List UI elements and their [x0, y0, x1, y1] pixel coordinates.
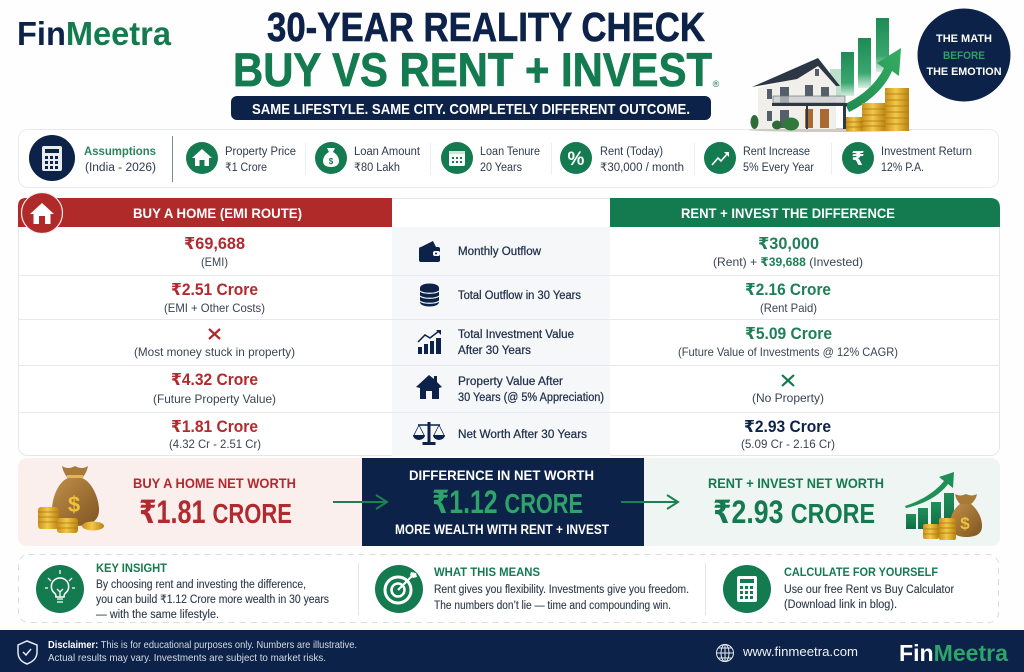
icon: home badge [22, 192, 62, 234]
badge: the math before the emotion: BEFORE [943, 50, 985, 62]
title line 2: BUY VS RENT + INVEST [233, 43, 712, 96]
insight: what this means: WHAT THIS MEANS [434, 565, 540, 579]
item: loan amount: Loan Amount [354, 146, 421, 158]
item: property price: Property Price [225, 146, 296, 158]
assumptions heading: (India - 2026) [85, 162, 156, 174]
disclaimer [48, 639, 357, 664]
cell: investment value buy: (Most money stuck in property) [134, 345, 295, 359]
arrow: difference to rent [621, 495, 678, 509]
panel: assumptions strip [18, 130, 998, 188]
column: buy values [134, 235, 295, 451]
insight: key insight [36, 561, 329, 621]
cell: net worth buy: (4.32 Cr - 2.51 Cr) [169, 437, 261, 451]
cell: monthly outflow rent [713, 235, 863, 269]
insight: key insight: KEY INSIGHT [96, 561, 168, 575]
cell: property value rent [752, 375, 824, 405]
item: property price [186, 142, 296, 174]
registered mark: ® [713, 79, 720, 89]
metric: net worth [413, 422, 587, 445]
panel: difference in net worth: MORE WEALTH WITH RENT + INVEST [395, 522, 610, 537]
panel: difference in net worth: ₹1.12 CRORE [432, 484, 583, 520]
badge: the math before the emotion: THE MATH [936, 33, 992, 45]
item: loan tenure: Loan Tenure [480, 146, 540, 158]
cell: property value buy: ₹4.32 Crore [171, 371, 258, 389]
cell: monthly outflow buy [184, 235, 245, 269]
badge: the math before the emotion: THE EMOTION [926, 66, 1002, 78]
assumptions heading [84, 146, 156, 174]
item: rent today [560, 142, 684, 174]
badge: the math before the emotion [918, 8, 1010, 102]
cell: investment value buy [134, 329, 295, 359]
panel: difference in net worth: DIFFERENCE IN NET WORTH [409, 467, 594, 483]
panel: rent + invest net worth [644, 458, 1000, 546]
metric: total investment value: Total Investment Value [458, 329, 574, 341]
rent net worth value: ₹2.93 CRORE [713, 494, 875, 530]
buy net worth label: BUY A HOME NET WORTH [133, 475, 296, 491]
column: rent + invest values [678, 235, 898, 451]
header: buy a home: BUY A HOME (EMI ROUTE) [133, 205, 302, 221]
cell: investment value rent: (Future Value of Investments @ 12% CAGR) [678, 345, 898, 359]
item: loan tenure [441, 142, 540, 174]
item: loan amount: $ [329, 157, 334, 166]
header: buy a home [18, 198, 392, 227]
cell: net worth rent: ₹2.93 Crore [744, 418, 831, 436]
icon: calculator [29, 135, 75, 181]
cell: net worth rent [741, 418, 835, 451]
cell: net worth buy [169, 418, 261, 451]
rent net worth label: RENT + INVEST NET WORTH [708, 475, 884, 491]
metric: net worth: Net Worth After 30 Years [458, 429, 587, 441]
panel: comparison table [18, 192, 1000, 456]
cell: total outflow rent [745, 281, 831, 315]
panel: difference in net worth [362, 458, 644, 546]
item: rent today: % [568, 149, 585, 170]
cell: monthly outflow rent: (Rent) + ₹39,688 (Invested) [713, 255, 863, 269]
subtitle pill: SAME LIFESTYLE. SAME CITY. COMPLETELY DIFFERENT OUTCOME. [252, 101, 690, 118]
item: investment return: 12% P.A. [881, 162, 924, 174]
item: rent increase [704, 142, 814, 174]
item: loan amount [315, 142, 421, 174]
item: investment return [842, 142, 972, 174]
icon: money bag and coins [38, 466, 104, 533]
cell: net worth rent: (5.09 Cr - 2.16 Cr) [741, 437, 835, 451]
metric: monthly outflow: Monthly Outflow [458, 246, 542, 258]
insight: calculate for yourself: CALCULATE FOR YOURSELF [784, 565, 938, 579]
icon: growth chart, coins and bag: $ [960, 514, 970, 533]
header: rent + invest: RENT + INVEST THE DIFFERENCE [681, 205, 895, 221]
metric: property value: 30 Years (@ 5% Appreciation) [458, 392, 604, 404]
icon: target [375, 565, 423, 613]
panel: buy net worth [18, 458, 363, 546]
item: rent today: ₹30,000 / month [600, 162, 684, 174]
icon: calculator [723, 565, 771, 613]
insight: calculate for yourself: Use our free Rent vs Buy Calculator [784, 584, 954, 596]
website: www.finmeetra.com [742, 644, 858, 659]
item: loan amount: ₹80 Lakh [354, 162, 400, 174]
cell: investment value rent: ₹5.09 Crore [745, 325, 832, 343]
item: investment return: ₹ [851, 149, 865, 170]
insight: what this means: Rent gives you flexibility. Investments give you freedom. [434, 584, 689, 596]
metric: total investment value [418, 329, 574, 357]
insight: calculate for yourself: (Download link in blog). [784, 599, 897, 611]
icon: globe [716, 644, 734, 662]
cell: property value buy [153, 371, 276, 406]
cell: total outflow rent: (Rent Paid) [760, 301, 817, 315]
title block [231, 4, 720, 120]
metric: total outflow: Total Outflow in 30 Years [458, 290, 581, 302]
item: rent today: Rent (Today) [600, 146, 663, 158]
item: rent increase: Rent Increase [743, 146, 810, 158]
footer logo: FinMeetra [899, 640, 1008, 666]
cell: total outflow buy: (EMI + Other Costs) [164, 301, 265, 315]
insight: key insight: — with the same lifestyle. [96, 609, 219, 621]
panel: insights [18, 554, 998, 622]
item: rent increase: 5% Every Year [743, 162, 814, 174]
cell: monthly outflow buy: (EMI) [201, 255, 228, 269]
title line 1: 30-YEAR REALITY CHECK [267, 4, 705, 50]
cell: property value rent: (No Property) [752, 391, 824, 405]
cell: monthly outflow rent: ₹30,000 [758, 235, 819, 253]
metric: total investment value: After 30 Years [458, 345, 531, 357]
logo: FinMeetra: FinMeetra [17, 15, 172, 52]
cell: net worth buy: ₹1.81 Crore [171, 418, 258, 436]
header: rent + invest [610, 198, 1000, 227]
insight: key insight: By choosing rent and investing the difference, [96, 579, 306, 591]
icon: shield [18, 641, 37, 664]
assumptions heading: Assumptions [84, 146, 156, 158]
cell: monthly outflow buy: ₹69,688 [184, 235, 245, 253]
disclaimer: Actual results may vary. Investments are subject to market risks. [48, 652, 326, 664]
column: comparison metrics [413, 241, 604, 445]
disclaimer: Disclaimer: This is for educational purposes only. Numbers are illustrative. [48, 639, 357, 651]
insight: key insight: you can build ₹1.12 Crore more wealth in 30 years [96, 594, 329, 606]
item: investment return: Investment Return [881, 146, 972, 158]
insight: calculate for yourself [723, 565, 954, 613]
cell: total outflow buy: ₹2.51 Crore [171, 281, 258, 299]
cell: investment value rent [678, 325, 898, 359]
cell: property value buy: (Future Property Value) [153, 392, 276, 406]
cell: total outflow rent: ₹2.16 Crore [745, 281, 831, 299]
illustration: house with growth bars and coins [748, 18, 912, 132]
metric: total outflow [420, 284, 581, 306]
cell: total outflow buy [164, 281, 265, 315]
item: loan tenure: 20 Years [480, 162, 522, 174]
insight: what this means: The numbers don’t lie — time and compounding win. [434, 600, 671, 612]
icon: growth chart, coins and bag [905, 472, 982, 540]
icon: light bulb [36, 565, 84, 613]
buy net worth value: ₹1.81 CRORE [139, 494, 292, 530]
metric: monthly outflow [419, 241, 542, 262]
footer [0, 630, 1024, 672]
arrow: buy to difference [333, 495, 387, 509]
item: property price: ₹1 Crore [225, 162, 267, 174]
metric: property value [416, 375, 604, 404]
metric: property value: Property Value After [458, 376, 563, 388]
subtitle pill [231, 96, 711, 120]
insight: what this means [375, 565, 689, 613]
icon: money bag and coins: $ [68, 492, 80, 517]
